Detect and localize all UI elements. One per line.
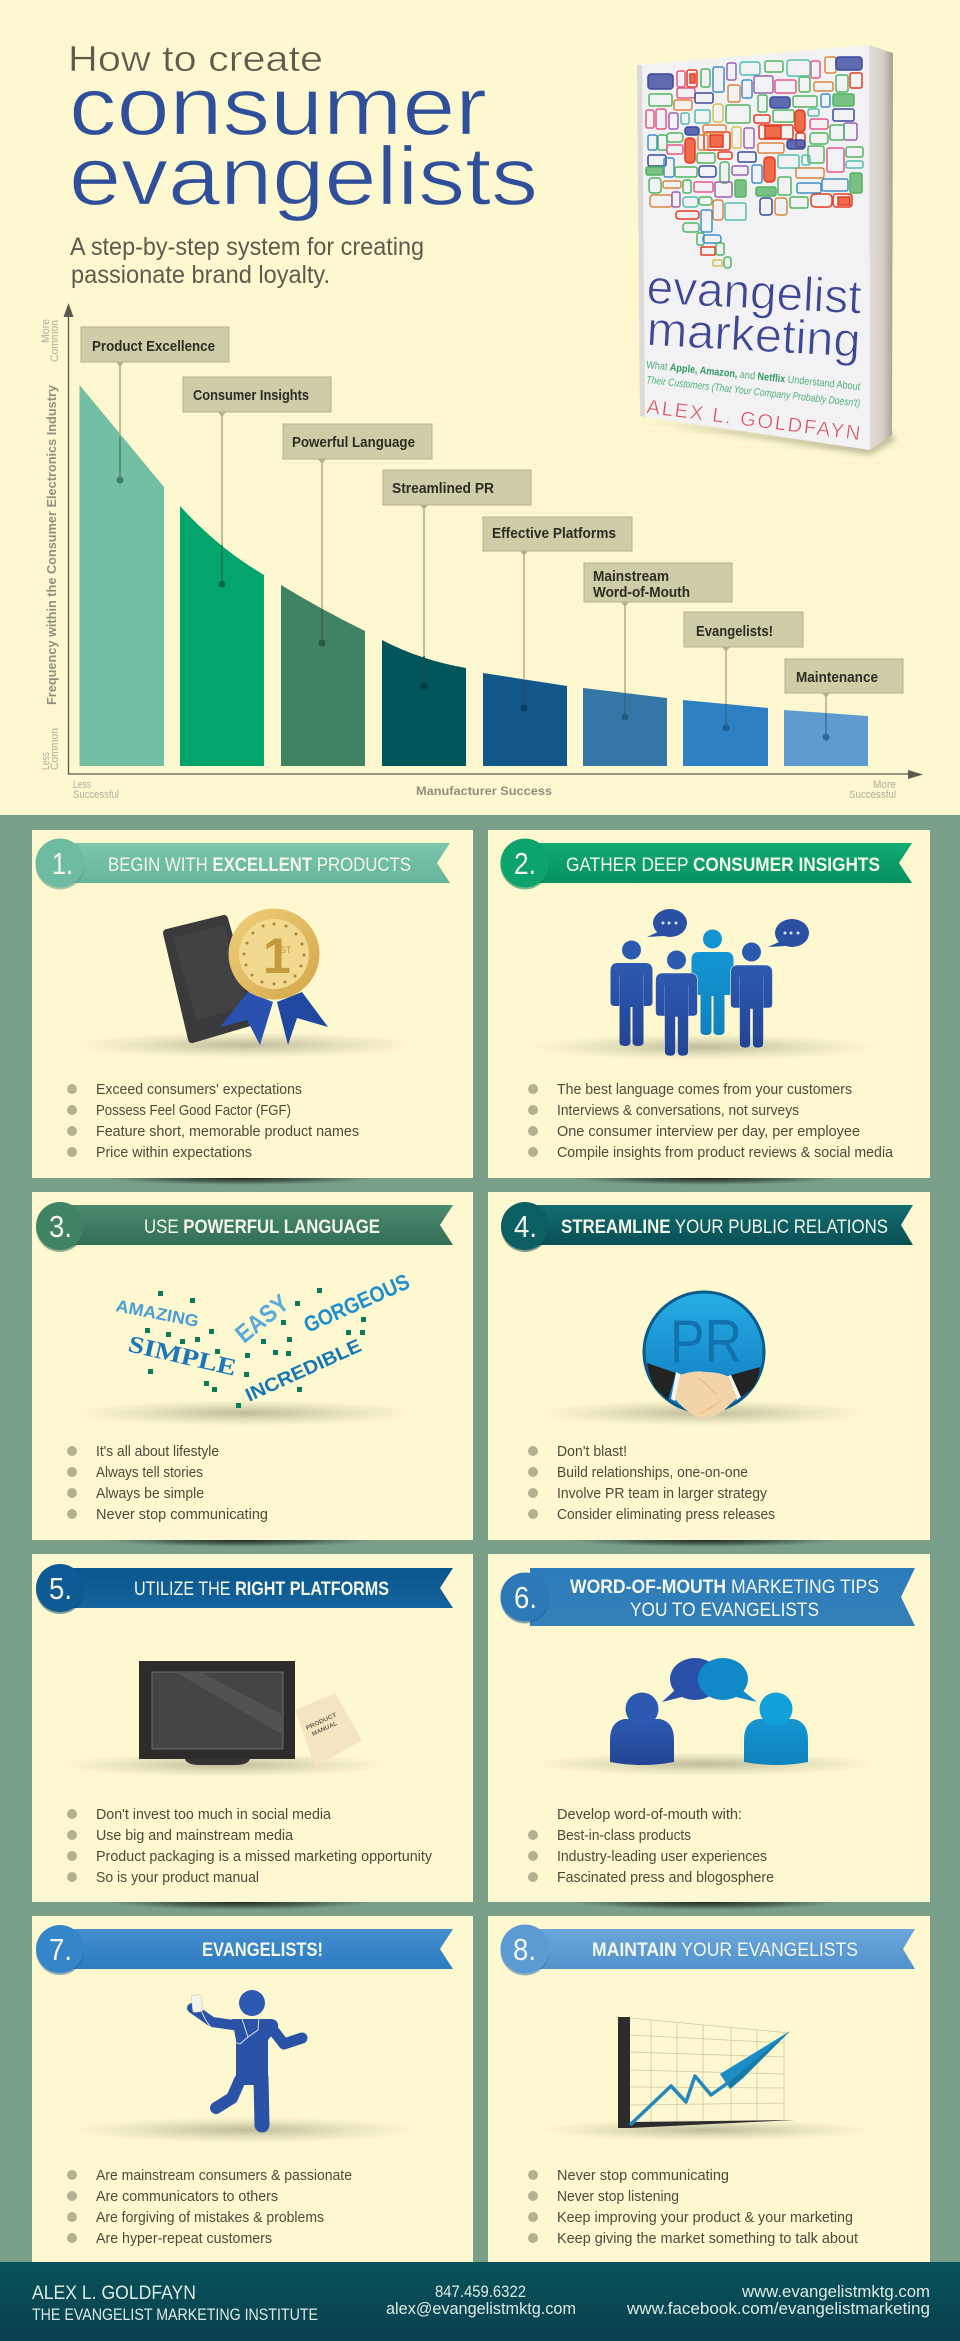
phones speech bubble — [646, 57, 863, 268]
ribbon heading 6: YOU TO EVANGELISTS — [630, 1600, 819, 1621]
bullet list 3 — [67, 1444, 268, 1523]
panel 7: evangelists — [32, 1916, 473, 2262]
bullet list 5 — [67, 1807, 433, 1886]
main title: consumer — [69, 60, 487, 152]
word cloud: GORGEOUS — [300, 1269, 413, 1338]
word cloud: AMAZING — [114, 1296, 200, 1331]
x axis labels: Less — [73, 779, 91, 791]
bullet list 6: Develop word-of-mouth with: — [557, 1807, 742, 1823]
bullet list 4 — [528, 1444, 775, 1523]
bullet list 6 — [528, 1807, 774, 1886]
callout: Mainstream Word-of-Mouth: Mainstream — [593, 568, 669, 585]
bullet list 8: Keep improving your product & your marketing — [557, 2210, 853, 2226]
ribbon heading 8: MAINTAIN YOUR EVANGELISTS — [592, 1940, 858, 1961]
panel 3: powerful language — [32, 1192, 473, 1540]
book subtitle — [646, 359, 861, 410]
bullet list 8 — [528, 2168, 858, 2247]
ribbon heading 4 — [501, 1202, 913, 1252]
ribbon heading 7 — [36, 1925, 453, 1975]
bullet list 3: Always be simple — [96, 1486, 204, 1502]
bullet list 8: Never stop communicating — [557, 2168, 729, 2184]
panel 6: word of mouth — [488, 1554, 930, 1902]
bullet list 5: Use big and mainstream media — [96, 1828, 294, 1844]
main title — [69, 60, 538, 222]
callout: Maintenance: Maintenance — [796, 669, 878, 686]
ribbon heading 7: 7. — [49, 1932, 72, 1967]
bullet list 3: Always tell stories — [96, 1465, 203, 1481]
callout: Consumer Insights: Consumer Insights — [193, 387, 309, 404]
bullet list 3: It's all about lifestyle — [96, 1444, 219, 1460]
bullet list 1: Feature short, memorable product names — [96, 1124, 359, 1140]
bullet list 5: Product packaging is a missed marketing opportunity — [96, 1849, 433, 1865]
callout: Consumer Insights — [183, 377, 331, 588]
bullet list 1: Price within expectations — [96, 1145, 252, 1161]
ribbon heading 3: USE POWERFUL LANGUAGE — [144, 1217, 380, 1238]
icon: PR handshake: PR — [670, 1308, 742, 1375]
panel 1: excellent products — [32, 830, 473, 1178]
callout: Mainstream Word-of-Mouth — [584, 563, 732, 720]
word cloud: INCREDIBLE — [242, 1336, 365, 1407]
y axis labels: More — [40, 319, 52, 343]
panel shadows — [105, 1171, 840, 1910]
bullet list 6: Industry-leading user experiences — [557, 1849, 767, 1865]
bullet list 7 — [67, 2168, 352, 2247]
ribbon heading 3: 3. — [49, 1209, 72, 1244]
bullet list 4: Involve PR team in larger strategy — [557, 1486, 768, 1502]
word cloud — [114, 1269, 413, 1408]
ribbon heading 6: 6. — [514, 1580, 537, 1615]
callout: Powerful Language — [283, 424, 432, 646]
icon: phone and medal: 1 — [263, 928, 291, 984]
ribbon heading 1: 1. — [52, 846, 73, 881]
bullet list 5: So is your product manual — [96, 1870, 259, 1886]
y axis labels: Common — [49, 728, 61, 770]
ribbon heading 1 — [36, 838, 450, 890]
kicker: How to create — [68, 38, 323, 79]
icon: phone and medal — [167, 908, 328, 1045]
y axis labels: Less — [40, 752, 52, 770]
panel 5: right platforms — [32, 1554, 473, 1902]
ribbon heading 4: STREAMLINE YOUR PUBLIC RELATIONS — [561, 1217, 888, 1238]
bullet list 2: Interviews & conversations, not surveys — [557, 1103, 799, 1119]
callout: Powerful Language: Powerful Language — [292, 434, 415, 451]
book subtitle: Their Customers (That Your Company Probably Doesn't) — [646, 374, 861, 410]
panel 8: maintain — [488, 1916, 930, 2262]
subtitle — [70, 233, 424, 289]
bullet list 1: Exceed consumers' expectations — [96, 1082, 302, 1098]
footer contact — [386, 2283, 576, 2318]
subtitle: passionate brand loyalty. — [71, 261, 330, 289]
ribbon heading 4: 4. — [514, 1209, 537, 1244]
callout: Mainstream Word-of-Mouth: Word-of-Mouth — [593, 584, 690, 601]
ribbon heading 5: 5. — [49, 1571, 72, 1606]
bullet list 1 — [67, 1082, 359, 1161]
footer — [0, 2262, 960, 2341]
icon: dancing figure with music player — [191, 1990, 302, 2125]
chart: manufacturer success — [40, 303, 923, 801]
book title: evangelist — [645, 261, 863, 324]
bullet list 7: Are communicators to others — [96, 2189, 278, 2205]
bullet list 8: Keep giving the market something to talk about — [557, 2231, 858, 2247]
x axis labels — [73, 779, 896, 801]
icon: television and product manual — [139, 1661, 362, 1767]
ribbon heading 1: BEGIN WITH EXCELLENT PRODUCTS — [108, 855, 411, 876]
callout: Maintenance — [785, 659, 903, 740]
ribbon heading 6: WORD-OF-MOUTH MARKETING TIPS — [570, 1577, 879, 1598]
title block — [68, 38, 538, 289]
callout: Product Excellence: Product Excellence — [92, 338, 215, 355]
x axis labels: More — [873, 779, 896, 791]
callout: Effective Platforms — [483, 517, 632, 712]
callout: Effective Platforms: Effective Platforms — [492, 525, 616, 542]
ribbon heading 2: 2. — [514, 846, 536, 881]
main title: evangelists — [69, 130, 538, 222]
y axis labels: Common — [49, 320, 61, 362]
bullet list 4: Consider eliminating press releases — [557, 1507, 775, 1523]
x axis labels: Successful — [849, 789, 896, 801]
bullet list 2: One consumer interview per day, per employee — [557, 1124, 860, 1140]
callout: Product Excellence — [81, 327, 229, 484]
footer links: www.evangelistmktg.com — [741, 2283, 930, 2301]
bars — [80, 385, 868, 766]
icon: PR handshake — [644, 1292, 764, 1418]
book title: marketing — [645, 303, 862, 368]
ribbon heading 2: GATHER DEEP CONSUMER INSIGHTS — [566, 855, 880, 876]
ribbon heading 6 — [500, 1568, 915, 1626]
callout: Evangelists! — [684, 612, 803, 732]
ribbon heading 2 — [500, 838, 912, 890]
bullet list 7: Are forgiving of mistakes & problems — [96, 2210, 324, 2226]
footer name: ALEX L. GOLDFAYN — [32, 2283, 196, 2304]
footer name — [32, 2283, 318, 2324]
bullet list 7: Are hyper-repeat customers — [96, 2231, 272, 2247]
panel 4: public relations — [488, 1192, 930, 1540]
bullet list 2 — [528, 1082, 894, 1161]
ribbon heading 3 — [36, 1202, 453, 1252]
icon: television and product manual: MANUAL — [311, 1721, 339, 1738]
footer name: THE EVANGELIST MARKETING INSTITUTE — [32, 2306, 318, 2324]
x axis labels: Successful — [73, 789, 119, 801]
bullet list 2: Compile insights from product reviews & social media — [557, 1145, 894, 1161]
book cover — [637, 45, 896, 455]
icon: two people with speech bubbles — [610, 1658, 808, 1765]
bullet list 1: Possess Feel Good Factor (FGF) — [96, 1103, 291, 1119]
y axis labels — [40, 319, 61, 770]
footer contact: 847.459.6322 — [435, 2283, 526, 2301]
bullet list 2: The best language comes from your customers — [557, 1082, 852, 1098]
book subtitle: What Apple, Amazon, and Netflix Understand About — [646, 359, 861, 393]
bullet list 6: Fascinated press and blogosphere — [557, 1870, 774, 1886]
footer links: www.facebook.com/evangelistmarketing — [626, 2300, 930, 2318]
book title — [645, 261, 863, 368]
callout: Evangelists!: Evangelists! — [696, 623, 773, 640]
steps section background — [0, 815, 960, 2262]
ribbon heading 5: UTILIZE THE RIGHT PLATFORMS — [134, 1579, 389, 1600]
icon: television and product manual: PRODUCT — [305, 1712, 338, 1732]
x axis labels: Manufacturer Success — [416, 784, 552, 798]
bullet list 5: Don't invest too much in social media — [96, 1807, 332, 1823]
footer contact: alex@evangelistmktg.com — [386, 2300, 576, 2318]
bullet list 4: Build relationships, one-on-one — [557, 1465, 748, 1481]
y axis labels: Frequency within the Consumer Electronics Industry — [45, 385, 59, 705]
bullet list 7: Are mainstream consumers & passionate — [96, 2168, 352, 2184]
callout: Streamlined PR: Streamlined PR — [392, 480, 494, 497]
axes — [64, 303, 923, 779]
footer links — [626, 2283, 930, 2318]
word cloud: SIMPLE — [126, 1332, 239, 1382]
ribbon heading 8: 8. — [513, 1932, 536, 1967]
icon: rising arrow chart — [618, 2017, 795, 2128]
panel 2: consumer insights — [488, 830, 930, 1178]
ribbon heading 7: EVANGELISTS! — [202, 1940, 323, 1961]
ribbon heading 5 — [36, 1564, 453, 1614]
word cloud: EASY — [230, 1289, 295, 1349]
book author: ALEX L. GOLDFAYN — [645, 396, 861, 445]
callout: Streamlined PR — [383, 470, 531, 690]
icon: group of people talking — [610, 909, 809, 1056]
bullet list 3: Never stop communicating — [96, 1507, 268, 1523]
bullet list 6: Best-in-class products — [557, 1828, 691, 1844]
icon: phone and medal: ST — [280, 945, 292, 955]
bullet list 4: Don't blast! — [557, 1444, 627, 1460]
subtitle: A step-by-step system for creating — [70, 233, 424, 261]
bullet list 8: Never stop listening — [557, 2189, 679, 2205]
ribbon heading 8 — [500, 1924, 915, 1976]
